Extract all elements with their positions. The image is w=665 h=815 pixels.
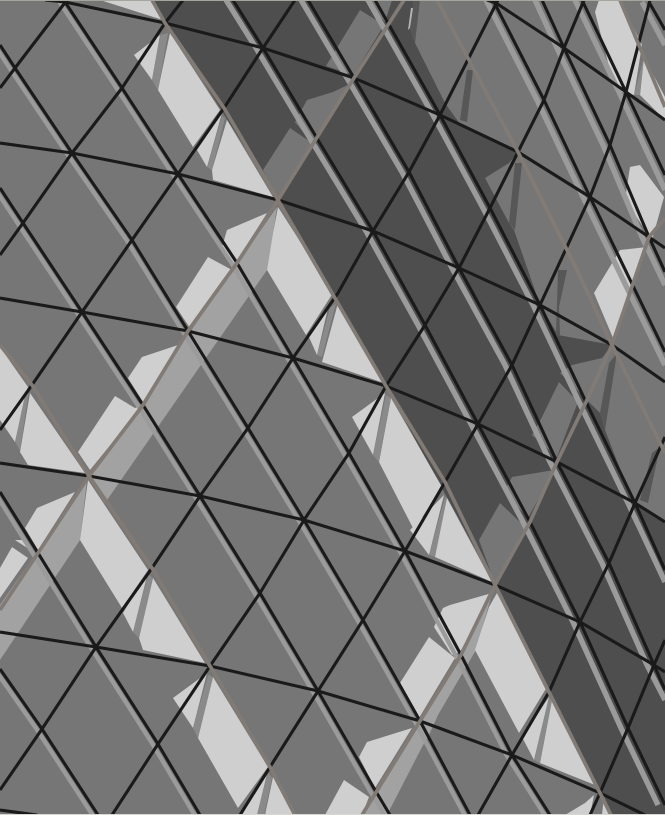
small pale wedge at the top of the dark glass <box>408 8 413 30</box>
reflections inside the dark glass <box>263 0 578 583</box>
dark mullion shadows <box>410 0 660 503</box>
bottom edge highlight <box>0 814 665 815</box>
light mullion strips on the right diagonals <box>226 0 665 805</box>
top edge highlight <box>0 0 665 1</box>
panel: dark shadowed glass <box>152 0 665 815</box>
medium grey window bands <box>0 207 493 815</box>
